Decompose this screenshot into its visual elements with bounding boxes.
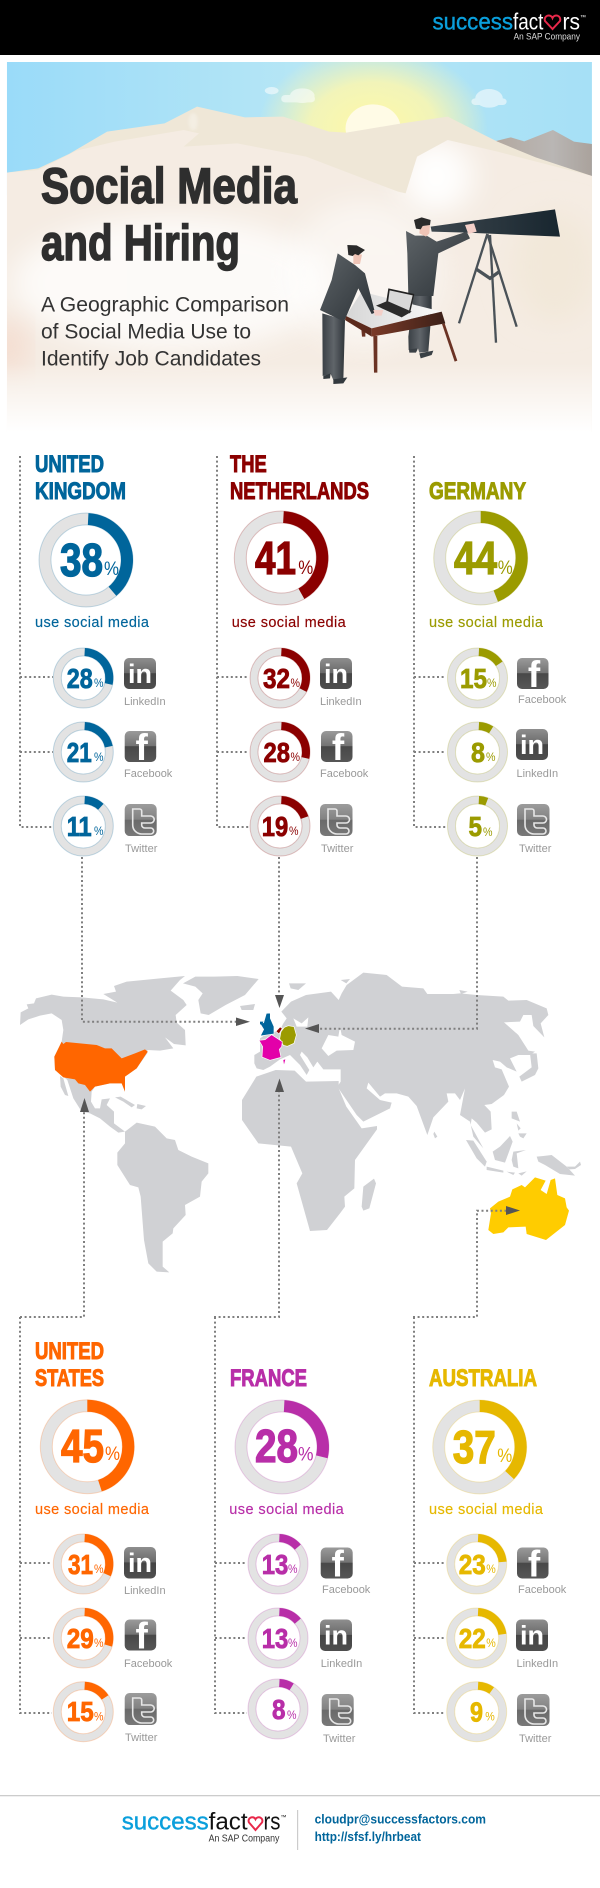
tripod xyxy=(459,234,517,343)
donut: LinkedIn 32%: 32 xyxy=(263,663,290,694)
donut: LinkedIn 28% xyxy=(53,648,113,708)
label: Facebook xyxy=(320,768,369,780)
donut: overall 45% xyxy=(40,1400,134,1494)
donut: LinkedIn 28%: 28 xyxy=(67,663,93,694)
icon: Facebook: f xyxy=(332,1544,345,1584)
donut: Facebook 15%: 15 xyxy=(460,663,487,694)
gray mountain xyxy=(494,130,592,177)
region: European countries xyxy=(259,1013,296,1064)
heading: The Netherlands: NETHERLANDS xyxy=(230,478,369,505)
footer logo: ™ xyxy=(280,1814,286,1821)
icon: Twitter xyxy=(517,1694,550,1726)
donut: Facebook 23% xyxy=(447,1534,507,1594)
connector: Australia to map xyxy=(413,1206,520,1317)
donut: Twitter 5%: 5 xyxy=(468,811,482,842)
connector tree xyxy=(20,1317,52,1713)
world map xyxy=(20,973,581,1272)
heading: United States: UNITED xyxy=(35,1338,104,1365)
subtitle xyxy=(41,294,289,370)
donut: Twitter 8%: % xyxy=(287,1708,297,1722)
donut: overall 28%: 28 xyxy=(255,1420,298,1472)
caption: use social media xyxy=(35,615,150,631)
connector: United States to map xyxy=(20,1098,89,1317)
donut: Facebook 15%: % xyxy=(487,676,497,690)
heading: United Kingdom xyxy=(35,451,126,505)
donut: Twitter 5% xyxy=(448,796,508,856)
region: United States xyxy=(54,1042,148,1092)
icon: LinkedIn: in xyxy=(128,659,152,689)
sun glow xyxy=(266,62,482,133)
donut: Facebook 28% xyxy=(250,722,310,782)
icon: Facebook xyxy=(125,1616,156,1656)
footer contact text: http://sfsf.ly/hrbeat xyxy=(315,1829,422,1844)
donut: LinkedIn 28%: % xyxy=(94,676,104,690)
label: LinkedIn xyxy=(516,1658,558,1670)
standing man jacket xyxy=(406,231,470,296)
logo: successfactors: ™ xyxy=(580,14,586,21)
icon: LinkedIn: in xyxy=(520,730,544,760)
label: Facebook xyxy=(322,1584,371,1596)
donut: LinkedIn 13%: 13 xyxy=(262,1623,288,1654)
donut: Twitter 5%: % xyxy=(483,825,493,839)
title xyxy=(41,158,298,271)
donut: Facebook 23%: 23 xyxy=(459,1549,486,1580)
icon: Facebook: f xyxy=(136,727,149,768)
caption: use social media xyxy=(229,1502,345,1518)
heading: United States xyxy=(35,1338,104,1392)
donut: overall 38%: 38 xyxy=(60,534,103,586)
donut: overall 44%: % xyxy=(498,558,513,579)
logo: successfactors: fact xyxy=(513,8,544,34)
label: LinkedIn xyxy=(516,768,558,780)
icon: Twitter xyxy=(125,1693,157,1725)
table xyxy=(373,336,377,373)
laptop xyxy=(386,288,414,313)
donut: Twitter 9% xyxy=(447,1682,507,1742)
donut: overall 28%: % xyxy=(298,1444,314,1466)
hero banner illustration xyxy=(0,45,597,432)
subtitle: A Geographic Comparison xyxy=(41,294,289,316)
donut: Twitter 11%: 11 xyxy=(67,811,92,842)
label: LinkedIn xyxy=(124,696,166,708)
donut: overall 28% xyxy=(235,1400,329,1494)
connector: France to map xyxy=(214,1078,284,1317)
panel: France xyxy=(215,1317,371,1745)
subtitle: Identify Job Candidates xyxy=(41,348,261,370)
donut: Twitter 19%: % xyxy=(289,824,299,838)
donut: LinkedIn 8%: 8 xyxy=(471,737,485,768)
illustration: two men with telescope and laptop xyxy=(320,209,560,384)
leaning man legs xyxy=(322,313,345,380)
donut: Twitter 15%: % xyxy=(94,1710,104,1724)
donut: Facebook 15% xyxy=(448,648,508,708)
leaning man jacket xyxy=(320,253,375,322)
standing man legs xyxy=(408,295,432,353)
connector tree xyxy=(414,1317,445,1713)
panel: United Kingdom xyxy=(20,451,173,856)
soft light on the foreground xyxy=(0,140,597,373)
logo: successfactors: An SAP Company xyxy=(514,32,580,42)
label: LinkedIn xyxy=(320,696,362,708)
connector: Netherlands to map xyxy=(275,857,284,1008)
donut: Facebook 21% xyxy=(53,722,113,782)
logo: successfactors xyxy=(432,8,586,42)
donut: Twitter 15%: 15 xyxy=(67,1696,94,1727)
footer logo: An SAP Company xyxy=(209,1834,279,1845)
donut: overall 37%: % xyxy=(497,1446,512,1467)
donut: LinkedIn 31% xyxy=(53,1534,113,1594)
back dune xyxy=(7,106,592,194)
donut: Facebook 13%: % xyxy=(288,1562,298,1576)
donut: Twitter 9%: % xyxy=(485,1710,495,1724)
connector tree xyxy=(217,456,249,827)
connector tree xyxy=(215,1317,247,1713)
icon: LinkedIn: in xyxy=(520,1620,544,1650)
logo: successfactors: rs xyxy=(562,8,580,34)
icon: Twitter xyxy=(125,804,157,836)
footer logo xyxy=(122,1808,286,1845)
donut: Twitter 8%: 8 xyxy=(272,1694,286,1725)
label: Twitter xyxy=(321,843,354,855)
header bar xyxy=(0,0,600,55)
clouds xyxy=(265,87,507,108)
label: Facebook xyxy=(518,694,567,706)
donut: Facebook 28%: % xyxy=(290,750,300,764)
footer logo: success xyxy=(122,1808,209,1836)
heading: The Netherlands: THE xyxy=(230,451,267,478)
label: Twitter xyxy=(519,1733,552,1745)
donut: LinkedIn 8% xyxy=(448,722,508,782)
icon: Facebook: f xyxy=(528,1544,541,1584)
telescope xyxy=(431,209,560,237)
icon: Facebook xyxy=(517,654,548,695)
title: and Hiring xyxy=(41,215,240,271)
heading: France: FRANCE xyxy=(230,1365,307,1392)
donut: Facebook 29%: 29 xyxy=(67,1623,94,1654)
donut: LinkedIn 31%: % xyxy=(94,1562,104,1576)
donut: LinkedIn 13% xyxy=(248,1608,308,1668)
footer contact text: cloudpr@successfactors.com xyxy=(315,1811,486,1826)
heading: Australia: AUSTRALIA xyxy=(429,1365,537,1392)
icon: Twitter xyxy=(322,1694,354,1726)
panel: Australia xyxy=(414,1317,567,1745)
icon: Twitter xyxy=(517,804,550,836)
donut: Twitter 11% xyxy=(53,796,113,856)
donut: LinkedIn 22%: % xyxy=(486,1636,496,1650)
region: Australia xyxy=(488,1177,569,1240)
footer xyxy=(0,1795,600,1850)
panel: United States xyxy=(20,1317,173,1744)
donut: Facebook 23%: % xyxy=(486,1562,496,1576)
donut: LinkedIn 32% xyxy=(250,648,310,708)
donut: overall 44%: 44 xyxy=(454,532,497,584)
icon: Facebook xyxy=(125,727,156,768)
connector tree xyxy=(20,456,53,827)
foreground dune xyxy=(7,130,592,386)
label: Facebook xyxy=(518,1584,567,1596)
icon: Facebook: f xyxy=(528,654,541,695)
heading: United Kingdom: KINGDOM xyxy=(35,478,126,505)
map: Americas xyxy=(20,976,259,1272)
donut: overall 45%: 45 xyxy=(61,1420,104,1472)
icon: LinkedIn: in xyxy=(324,659,348,689)
icon: Facebook xyxy=(517,1544,548,1584)
donut: Facebook 28%: 28 xyxy=(264,737,290,768)
donut: LinkedIn 22% xyxy=(447,1608,507,1668)
donut: LinkedIn 32%: % xyxy=(290,676,300,690)
donut: Twitter 19% xyxy=(250,796,310,856)
icon: Facebook xyxy=(321,1544,353,1584)
caption: use social media xyxy=(429,615,544,631)
donut: Twitter 11%: % xyxy=(94,824,104,838)
title: Social Media xyxy=(41,158,298,214)
donut: overall 38%: % xyxy=(104,559,119,580)
donut: overall 38% xyxy=(39,513,133,607)
connector tree xyxy=(414,456,446,827)
donut: overall 45%: % xyxy=(105,1444,120,1465)
heading: The Netherlands xyxy=(230,451,369,505)
donut: LinkedIn 31%: 31 xyxy=(68,1549,93,1580)
icon: Facebook xyxy=(321,727,352,768)
icon: Facebook: f xyxy=(136,1616,149,1656)
donut: Facebook 21%: % xyxy=(94,750,104,764)
icon: LinkedIn: in xyxy=(128,1548,152,1578)
footer contact text xyxy=(315,1811,486,1844)
label: Twitter xyxy=(125,1732,158,1744)
donut: overall 41%: 41 xyxy=(255,532,296,584)
footer logo: rs xyxy=(264,1808,280,1836)
donut: Twitter 9%: 9 xyxy=(470,1697,483,1728)
label: Facebook xyxy=(124,768,173,780)
donut: overall 41%: % xyxy=(298,558,313,579)
label: Twitter xyxy=(519,843,552,855)
donut: Facebook 13% xyxy=(248,1534,308,1594)
connector: UK to map xyxy=(82,857,250,1026)
donut: overall 37%: 37 xyxy=(453,1421,496,1473)
donut: overall 41% xyxy=(234,511,328,605)
donut: Twitter 15% xyxy=(53,1682,113,1742)
donut: overall 37% xyxy=(433,1400,527,1494)
donut: Facebook 29% xyxy=(53,1608,113,1668)
icon: Twitter xyxy=(320,804,352,836)
heading: United States: STATES xyxy=(35,1365,104,1392)
donut: LinkedIn 13%: % xyxy=(288,1636,298,1650)
panel: Germany xyxy=(414,456,567,856)
donut: LinkedIn 8%: % xyxy=(486,750,496,764)
label: LinkedIn xyxy=(321,1658,362,1670)
caption: use social media xyxy=(232,615,347,631)
donut: overall 44% xyxy=(434,511,528,605)
label: Twitter xyxy=(125,843,158,855)
map: Africa, Europe, Asia xyxy=(242,973,581,1240)
caption: use social media xyxy=(429,1502,544,1518)
donut: LinkedIn 22%: 22 xyxy=(459,1623,486,1654)
heading: United Kingdom: UNITED xyxy=(35,451,104,478)
label: Twitter xyxy=(323,1733,356,1745)
donut: Twitter 19%: 19 xyxy=(262,811,288,842)
label: Facebook xyxy=(124,1658,173,1670)
donut: Facebook 13%: 13 xyxy=(262,1549,288,1580)
panel: The Netherlands xyxy=(217,451,369,856)
caption: use social media xyxy=(35,1502,150,1518)
donut: Facebook 29%: % xyxy=(94,1636,104,1650)
subtitle: of Social Media Use to xyxy=(41,320,251,344)
connector: Germany to map xyxy=(305,857,477,1033)
logo: successfactors: success xyxy=(432,8,513,34)
heading: Germany: GERMANY xyxy=(429,478,526,505)
donut: Twitter 8% xyxy=(248,1679,308,1739)
footer logo: fact xyxy=(209,1808,248,1836)
icon: Facebook: f xyxy=(332,727,345,768)
donut: Facebook 21%: 21 xyxy=(67,737,92,768)
icon: LinkedIn: in xyxy=(324,1620,348,1650)
label: LinkedIn xyxy=(124,1585,166,1597)
